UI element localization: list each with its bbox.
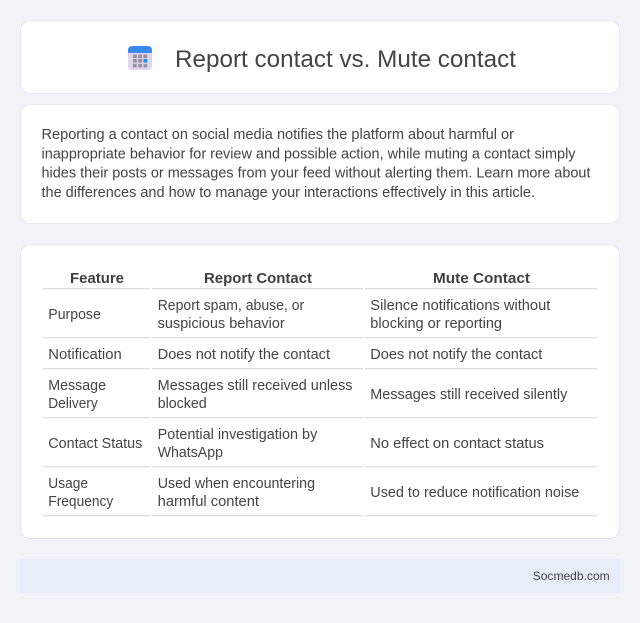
intro text — [42, 127, 590, 201]
intro text: the differences and how to manage your interactions effectively in this article. — [42, 185, 535, 201]
footer source label: Socmedb.com — [533, 569, 610, 583]
intro text: Reporting a contact on social media notifies the platform about harmful or — [42, 127, 514, 143]
icon: calendar — [128, 46, 152, 70]
row: message delivery: Messages still received unless — [158, 378, 352, 394]
row: message delivery — [48, 378, 568, 412]
row: message delivery: Delivery — [48, 396, 98, 412]
footer — [20, 559, 620, 593]
panel: introduction — [20, 104, 620, 224]
row: contact status — [48, 427, 544, 461]
row: notification — [48, 347, 542, 363]
panel: comparison table — [20, 244, 620, 538]
table header: Feature — [70, 270, 124, 287]
row: purpose: blocking or reporting — [370, 316, 502, 332]
row: notification: Does not notify the contact — [158, 347, 330, 363]
row: contact status: WhatsApp — [158, 445, 223, 461]
row: purpose — [48, 298, 550, 332]
row: usage frequency — [48, 476, 579, 510]
row: purpose: Purpose — [48, 307, 101, 323]
row: notification: Notification — [48, 347, 122, 363]
row: purpose: Report spam, abuse, or — [158, 298, 304, 314]
row: usage frequency: Usage — [48, 476, 88, 492]
row: message delivery: Message — [48, 378, 106, 394]
table header: Report Contact — [204, 270, 312, 287]
title: Report contact vs. Mute contact — [175, 46, 516, 73]
row: usage frequency: Used to reduce notification noise — [370, 485, 579, 501]
row: purpose: suspicious behavior — [158, 316, 285, 332]
row: purpose: Silence notifications without — [370, 298, 550, 314]
intro text: inappropriate behavior for review and possible action, while muting a contact simply — [42, 146, 576, 162]
title panel — [20, 20, 620, 94]
row: usage frequency: harmful content — [158, 494, 259, 510]
row: usage frequency: Used when encountering — [158, 476, 315, 492]
table header: Mute Contact — [433, 270, 530, 287]
row: notification: Does not notify the contact — [370, 347, 542, 363]
row: contact status: Potential investigation by — [158, 427, 318, 443]
table header — [70, 270, 530, 287]
row: message delivery: Messages still received silently — [370, 387, 568, 403]
row: usage frequency: Frequency — [48, 494, 114, 510]
row: message delivery: blocked — [158, 396, 207, 412]
intro text: hides their posts or messages from your feed without alerting them. Learn more about — [42, 166, 590, 182]
row: contact status: No effect on contact status — [370, 436, 544, 452]
row: contact status: Contact Status — [48, 436, 142, 452]
